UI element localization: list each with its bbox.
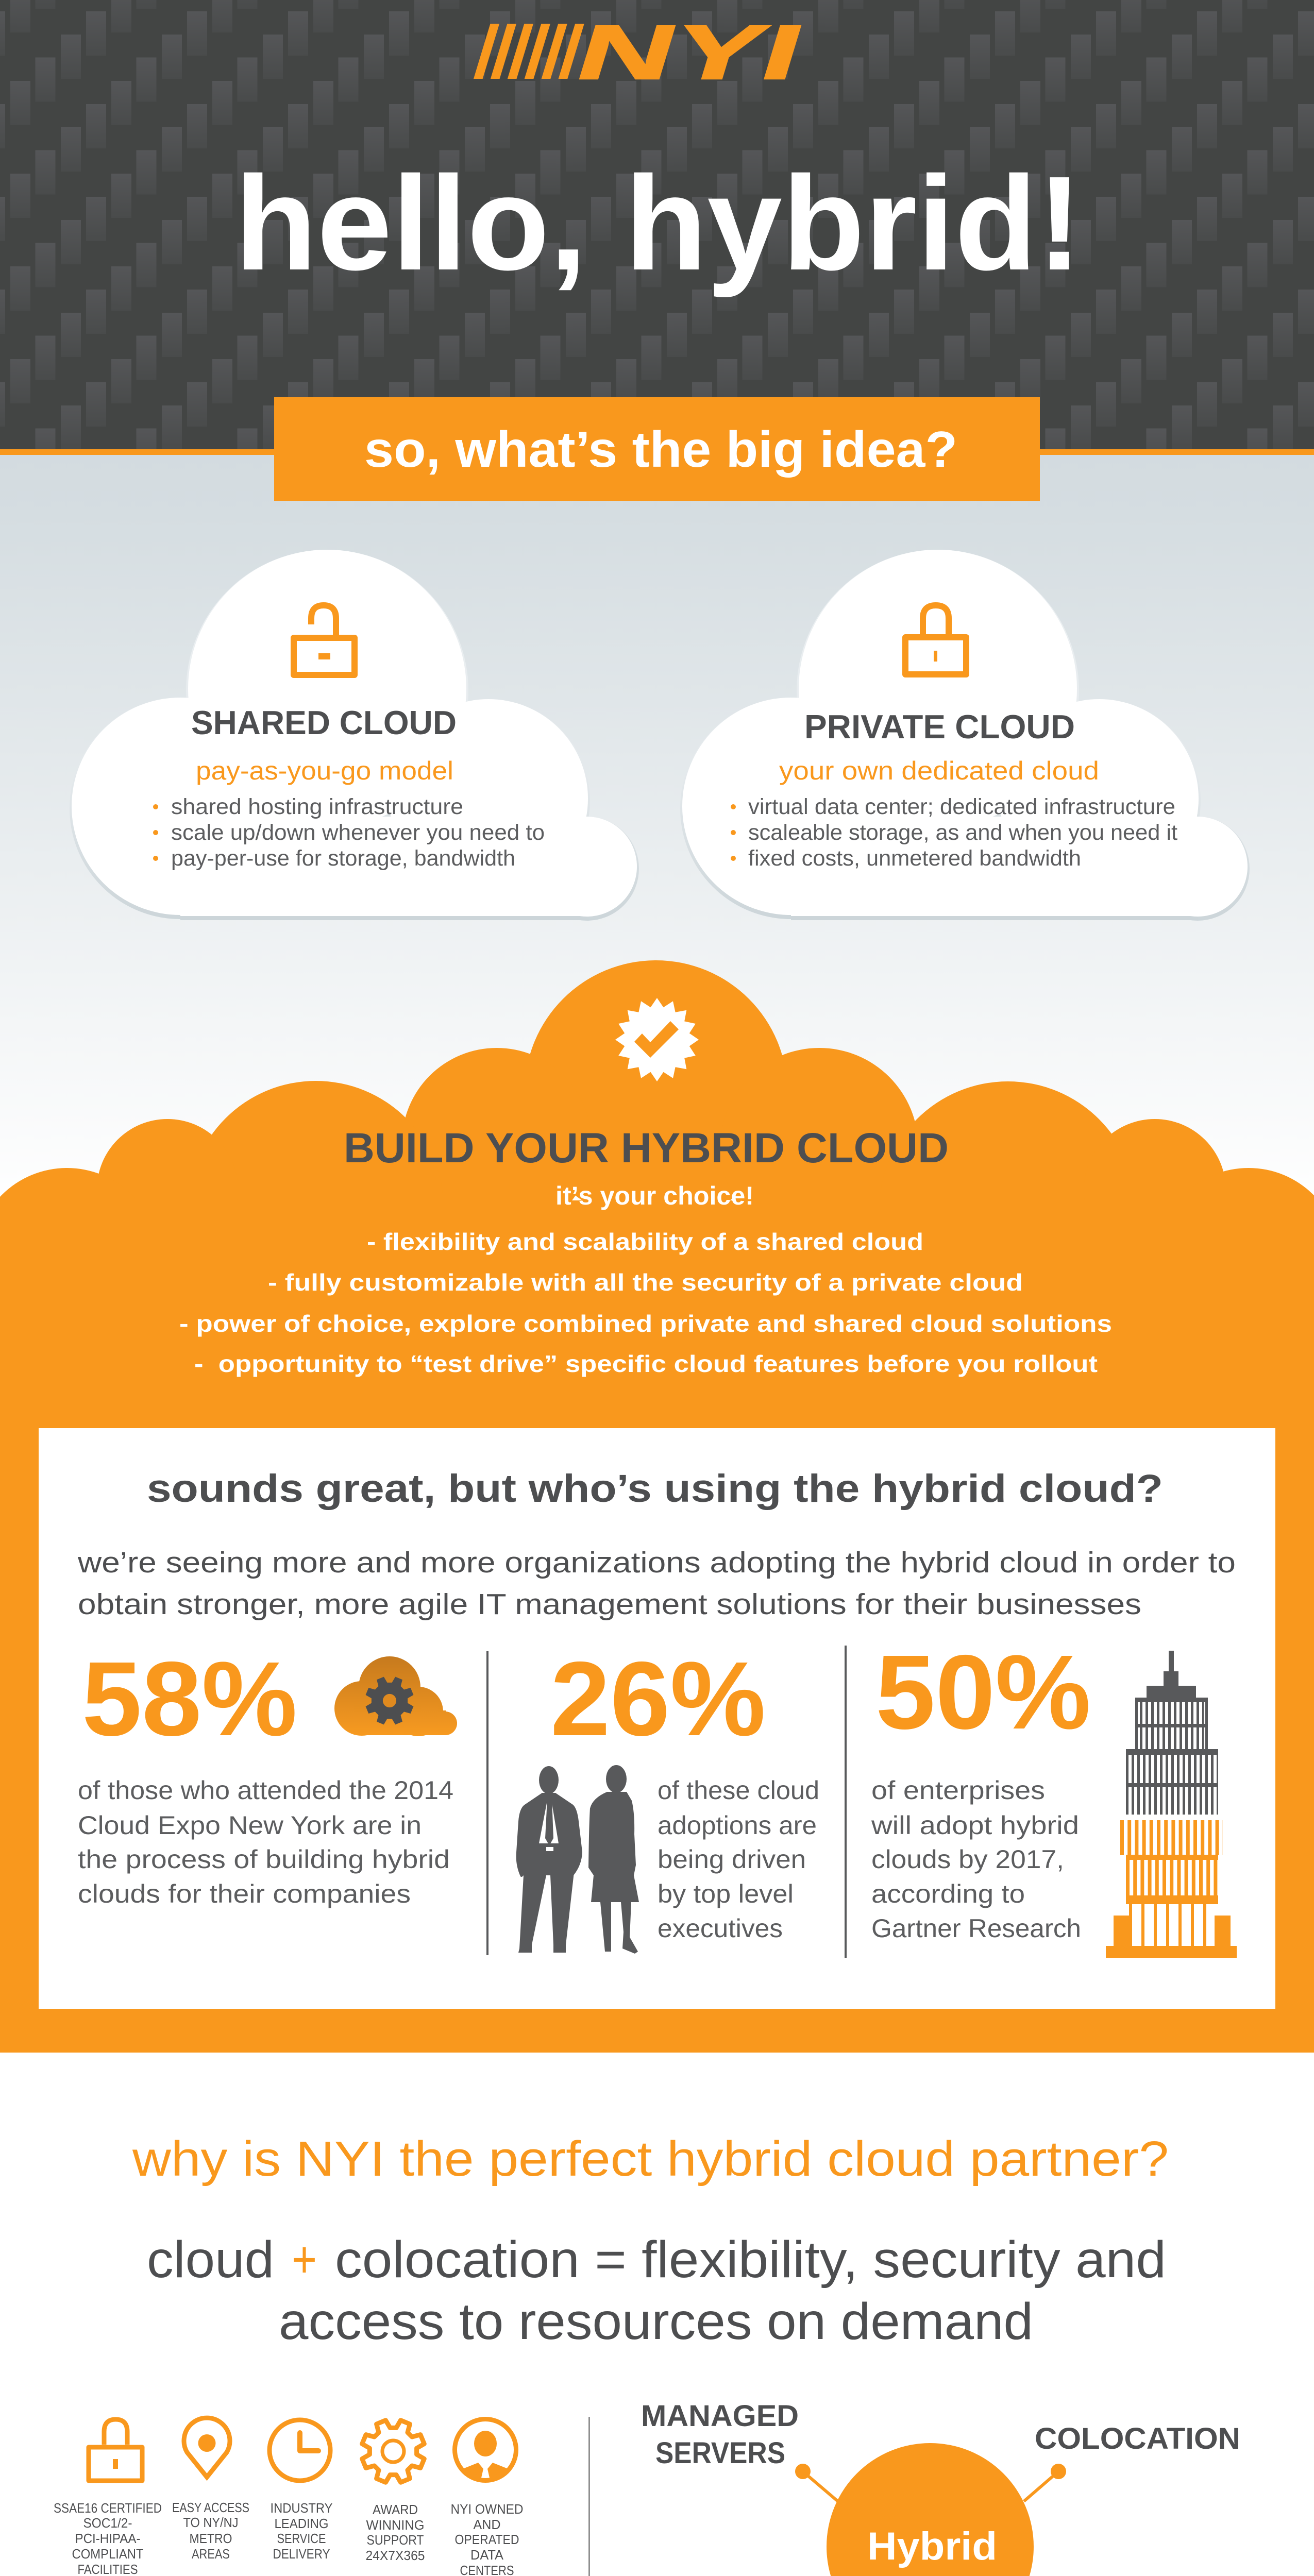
label: colocation: COLOCATION [1035, 2422, 1240, 2455]
divider two [845, 1646, 847, 1958]
labels: feature captions: SUPPORT [367, 2532, 424, 2548]
labels: feature captions: METRO [190, 2531, 232, 2546]
text: 50 percent description: clouds by 2017, [871, 1845, 1064, 1874]
icon: open padlock [294, 605, 355, 675]
icon: business people silhouettes [516, 1765, 639, 1954]
heading: build your hybrid cloud: BUILD YOUR HYBRID CLOUD [344, 1125, 949, 1172]
labels: feature captions: SSAE16 CERTIFIED [54, 2500, 162, 2516]
labels: feature captions: SERVICE [277, 2531, 326, 2546]
bullet list: private cloud [731, 794, 1177, 871]
heading: private cloud: PRIVATE CLOUD [804, 708, 1075, 745]
text: 26 percent description: by top level [658, 1879, 794, 1908]
heading: shared cloud: SHARED CLOUD [191, 704, 457, 741]
labels: feature captions: AWARD [373, 2502, 418, 2517]
panel: NYI feature diagram [54, 2418, 524, 2576]
icon: clock [269, 2420, 330, 2481]
icon: check badge [615, 998, 699, 1081]
logo: NYI header [474, 9, 814, 95]
statement: cloud plus colocation: access to resources on demand [279, 2293, 1033, 2350]
label: hybrid: Hybrid [867, 2524, 997, 2568]
intro text: obtain stronger, more agile IT management solutions for their businesses [78, 1588, 1141, 1621]
bullet list: private cloud: virtual data center; dedicated infrastructure [748, 794, 1175, 819]
text: 58 percent description: of those who attended the 2014 [78, 1776, 453, 1805]
statement: cloud plus colocation: colocation = flexibility, security and [335, 2231, 1166, 2289]
labels: feature captions: PCI-HIPAA- [75, 2531, 140, 2546]
text: 58 percent description: clouds for their companies [78, 1879, 411, 1908]
list: hybrid benefits: - flexibility and scalability of a shared cloud [367, 1228, 923, 1255]
label: managed servers: SERVERS [655, 2436, 785, 2470]
label: managed servers: MANAGED [641, 2399, 799, 2433]
text: 50 percent description [871, 1776, 1081, 1943]
labels: feature captions: AREAS [192, 2546, 230, 2562]
label: managed servers [641, 2399, 799, 2470]
labels: feature captions: TO NY/NJ [183, 2515, 238, 2530]
text: 26 percent description [658, 1776, 819, 1943]
text: 50 percent description: according to [871, 1879, 1025, 1908]
logo: NYI header: NYI [566, 9, 814, 95]
list: hybrid benefits: - power of choice, explore combined private and shared cloud solutions [179, 1310, 1112, 1337]
subheading: dedicated cloud: your own dedicated cloud [779, 756, 1099, 785]
labels: feature captions: WINNING [366, 2517, 425, 2533]
icon: gear [362, 2420, 424, 2482]
text: 58 percent description: Cloud Expo New York are in [78, 1811, 422, 1840]
text: 26 percent description: being driven [658, 1845, 806, 1874]
text: 26 percent description: adoptions are [658, 1811, 817, 1840]
panel: hybrid orange cloud [0, 960, 1314, 2053]
labels: feature captions: COMPLIANT [72, 2546, 144, 2562]
intro text [77, 1546, 1236, 1621]
labels: feature captions: EASY ACCESS [172, 2500, 249, 2515]
panel: shared cloud [72, 550, 637, 920]
stat: 50 percent: 50% [875, 1633, 1091, 1751]
banner: big idea [274, 397, 1040, 501]
bullet list: shared cloud: scale up/down whenever you need to [171, 820, 545, 845]
statement: cloud plus colocation [147, 2231, 1166, 2350]
bullet list: private cloud: scaleable storage, as and when you need it [748, 820, 1177, 845]
title: hello, hybrid! [234, 149, 1082, 299]
header orange rule [0, 449, 1314, 455]
icon: map pin [184, 2418, 230, 2477]
icon: closed padlock [905, 605, 966, 674]
labels: feature captions: INDUSTRY [270, 2500, 333, 2516]
list: hybrid benefits: - opportunity to “test drive” specific cloud features before you rollout [194, 1350, 1098, 1377]
header carbon background [0, 0, 1314, 455]
icon: skyscraper [1106, 1651, 1237, 1958]
labels: feature captions: LEADING [274, 2516, 329, 2531]
spokes and dots [778, 2464, 1066, 2576]
panel: private cloud [682, 550, 1248, 920]
labels: feature captions: 24X7X365 [366, 2548, 425, 2563]
icon: cloud with gear [334, 1656, 457, 1736]
heading: why NYI: why is NYI the perfect hybrid cloud partner? [132, 2131, 1169, 2187]
banner: big idea: so, what’s the big idea? [364, 421, 957, 478]
text: 58 percent description [78, 1776, 453, 1908]
text: 58 percent description: the process of building hybrid [78, 1845, 450, 1874]
bullet list: shared cloud: shared hosting infrastructure [171, 794, 463, 819]
text: 26 percent description: executives [658, 1914, 783, 1943]
intro text: we’re seeing more and more organizations adopting the hybrid cloud in order to [77, 1546, 1236, 1579]
labels: feature captions: NYI OWNED [450, 2501, 524, 2517]
bullet list: shared cloud: pay-per-use for storage, bandwidth [171, 846, 515, 871]
stat: 26 percent: 26% [550, 1640, 766, 1758]
text: 50 percent description: of enterprises [871, 1776, 1045, 1805]
statement: cloud plus colocation: + [292, 2231, 317, 2289]
labels: feature captions: DATA [470, 2547, 504, 2563]
icon: lock [89, 2419, 142, 2481]
subheading: its your choice: it’s your choice! [555, 1181, 754, 1210]
icon: person [454, 2419, 516, 2482]
subheading: pay as you go: pay-as-you-go model [196, 756, 453, 785]
list: hybrid benefits [179, 1228, 1112, 1377]
heading: sounds great: sounds great, but who’s using the hybrid cloud? [147, 1467, 1163, 1511]
panel: who is using hybrid cloud [39, 1428, 1275, 2009]
panel: hybrid diagram [603, 2399, 1240, 2576]
divider one [486, 1651, 488, 1955]
list: hybrid benefits: - fully customizable with all the security of a private cloud [268, 1269, 1023, 1296]
text: 50 percent description: Gartner Research [871, 1914, 1081, 1943]
hybrid circle [827, 2443, 1034, 2576]
text: 26 percent description: of these cloud [658, 1776, 819, 1805]
bullet list: shared cloud [153, 794, 545, 871]
labels: feature captions: DELIVERY [273, 2546, 330, 2562]
sky gradient background [0, 455, 1314, 1228]
labels: feature captions: AND [473, 2517, 501, 2532]
statement: cloud plus colocation: cloud [147, 2231, 274, 2289]
stat: 58 percent: 58% [82, 1640, 297, 1758]
text: 50 percent description: will adopt hybrid [871, 1811, 1079, 1840]
labels: feature captions [54, 2500, 524, 2576]
bullet list: private cloud: fixed costs, unmetered bandwidth [748, 846, 1081, 871]
labels: feature captions: OPERATED [454, 2532, 519, 2547]
divider: diagram centre [588, 2417, 590, 2576]
labels: feature captions: SOC1/2- [83, 2515, 132, 2531]
